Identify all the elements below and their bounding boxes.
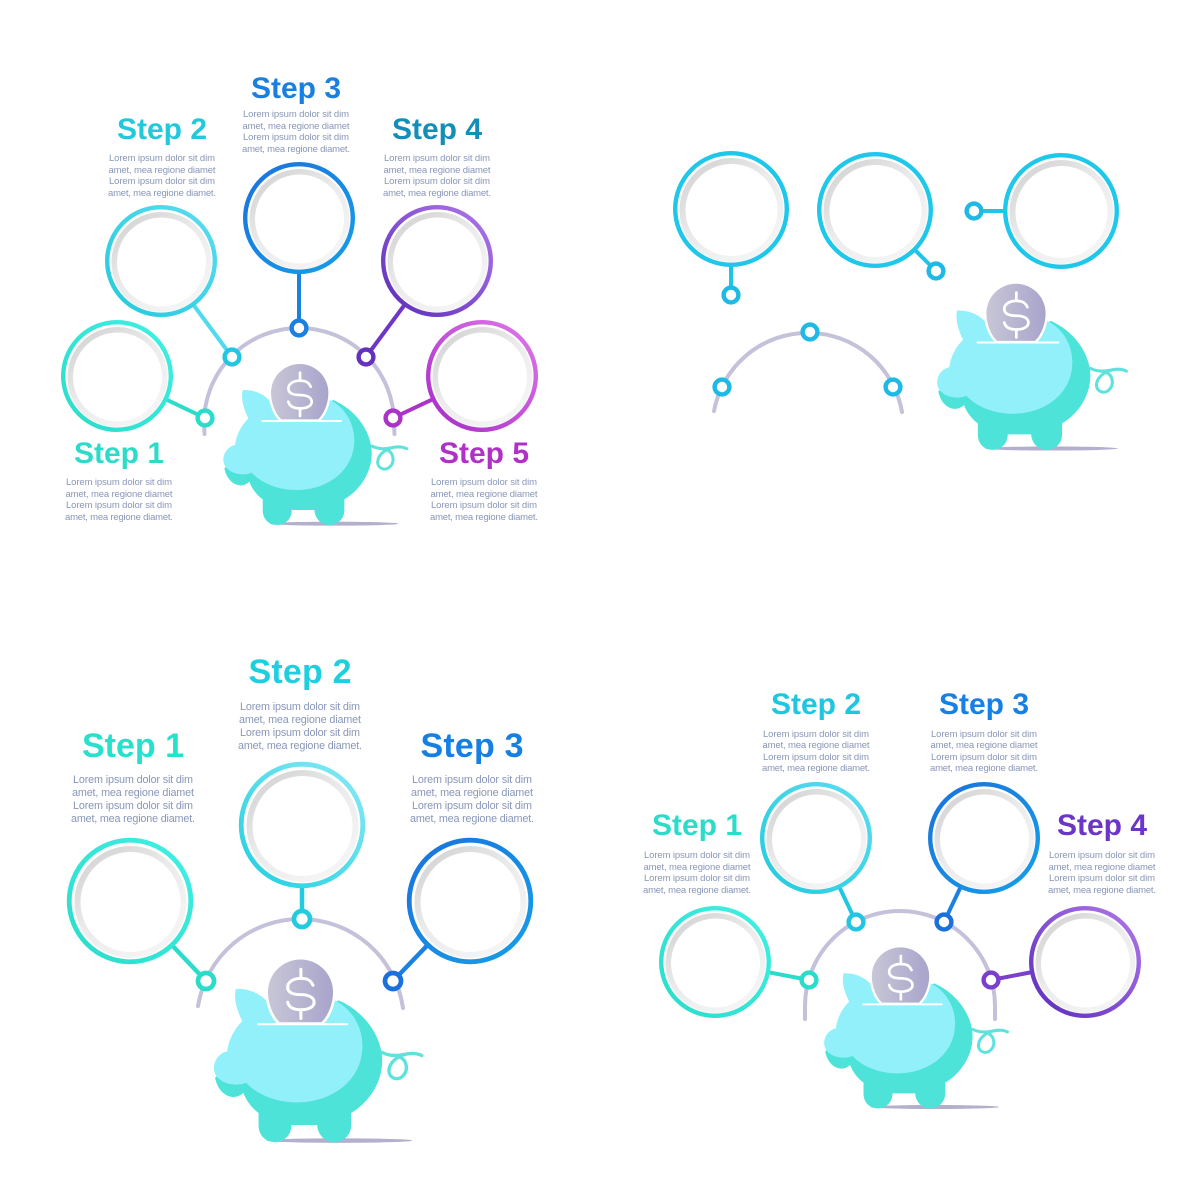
step 1 text: amet, mea regione diamet: [644, 862, 751, 873]
piggy bank icon: [214, 959, 422, 1143]
step 1 circle: [69, 840, 214, 989]
step 4 text: amet, mea regione diamet.: [383, 188, 491, 199]
step 1 text: [71, 727, 195, 825]
step 2 circle: [241, 764, 363, 927]
step 4 text: Lorem ipsum dolor sit dim: [1049, 873, 1155, 884]
step 2 text: amet, mea regione diamet.: [108, 188, 216, 199]
step 3 text: Step 3: [939, 688, 1029, 721]
step 3 text: amet, mea regione diamet.: [242, 144, 350, 155]
step 3 circle: [245, 164, 353, 335]
step 4 text: amet, mea regione diamet: [384, 165, 491, 176]
step 2 text: amet, mea regione diamet: [239, 714, 361, 726]
step 4 text: amet, mea regione diamet.: [1048, 885, 1156, 896]
step 4 text: Lorem ipsum dolor sit dim: [384, 153, 490, 164]
step 2 text: amet, mea regione diamet: [108, 165, 216, 176]
step 4 text: Lorem ipsum dolor sit dim: [384, 176, 490, 187]
step 3 text: [242, 72, 350, 155]
step 3 circle: [385, 840, 531, 989]
arc: [714, 333, 902, 412]
step 3 text: Step 3: [420, 727, 524, 765]
step 2 circle: [762, 784, 870, 929]
step 1 circle: [63, 322, 212, 430]
step 5 text: amet, mea regione diamet.: [430, 512, 538, 523]
step 3 text: amet, mea regione diamet: [242, 121, 350, 132]
step 2 text: Step 2: [248, 653, 352, 691]
step 2 circle: [107, 207, 239, 364]
step 5 text: Lorem ipsum dolor sit dim: [431, 477, 537, 488]
step 3 text: amet, mea regione diamet.: [410, 813, 534, 825]
blank circle middle: [819, 154, 943, 278]
step 1 text: Lorem ipsum dolor sit dim: [66, 477, 172, 488]
step 3 text: Step 3: [251, 72, 341, 105]
blank circle left: [675, 153, 787, 302]
step 4 text: [383, 113, 491, 199]
step 1 text: Step 1: [74, 437, 164, 470]
step 1 text: amet, mea regione diamet.: [71, 813, 195, 825]
step 1 text: Step 1: [82, 727, 184, 765]
step 5 circle: [386, 322, 536, 430]
step 2 text: Lorem ipsum dolor sit dim: [763, 752, 869, 763]
step 1 text: Lorem ipsum dolor sit dim: [644, 873, 750, 884]
step 2 text: Lorem ipsum dolor sit dim: [763, 729, 869, 740]
step 3 text: [930, 688, 1038, 774]
step 1 text: Step 1: [652, 809, 742, 842]
step 2 text: amet, mea regione diamet.: [762, 763, 870, 774]
step 1 text: Lorem ipsum dolor sit dim: [644, 850, 750, 861]
step 3 text: Lorem ipsum dolor sit dim: [931, 729, 1037, 740]
step 1 text: Lorem ipsum dolor sit dim: [73, 774, 193, 786]
step 1 text: [65, 437, 173, 523]
piggy bank icon: [937, 284, 1126, 451]
arc: [198, 919, 403, 1008]
step 3 text: Lorem ipsum dolor sit dim: [412, 800, 532, 812]
step 2 text: Step 2: [117, 113, 207, 146]
step 5 text: [430, 437, 538, 523]
step 1 text: [643, 809, 751, 896]
step 4 text: Lorem ipsum dolor sit dim: [1049, 850, 1155, 861]
step 3 text: amet, mea regione diamet: [930, 740, 1038, 751]
step 3 text: amet, mea regione diamet.: [930, 763, 1038, 774]
step 3 text: Lorem ipsum dolor sit dim: [412, 774, 532, 786]
step 4 text: Step 4: [392, 113, 482, 146]
step 3 text: Lorem ipsum dolor sit dim: [931, 752, 1037, 763]
step 5 text: Lorem ipsum dolor sit dim: [431, 500, 537, 511]
step 2 text: Lorem ipsum dolor sit dim: [109, 176, 215, 187]
step 2 text: [762, 688, 870, 774]
step 3 text: amet, mea regione diamet: [411, 787, 533, 799]
arc: [805, 911, 995, 1019]
step 2 text: Lorem ipsum dolor sit dim: [240, 701, 360, 713]
step 3 circle: [930, 784, 1038, 929]
step 3 text: Lorem ipsum dolor sit dim: [243, 132, 349, 143]
step 4 text: [1048, 809, 1156, 896]
step 2 text: Lorem ipsum dolor sit dim: [109, 153, 215, 164]
step 2 text: [238, 653, 362, 752]
arc nodes: [715, 325, 900, 394]
step 1 text: amet, mea regione diamet: [72, 787, 194, 799]
step 1 text: amet, mea regione diamet.: [643, 885, 751, 896]
step 5 text: Step 5: [439, 437, 529, 470]
step 1 text: Lorem ipsum dolor sit dim: [66, 500, 172, 511]
step 2 text: Lorem ipsum dolor sit dim: [240, 727, 360, 739]
step 3 text: [410, 727, 534, 825]
step 4 circle: [359, 207, 491, 364]
step 3 text: Lorem ipsum dolor sit dim: [243, 109, 349, 120]
step 1 text: amet, mea regione diamet.: [65, 512, 173, 523]
piggy bank icon: [824, 947, 1007, 1109]
step 1 circle: [661, 908, 816, 1016]
step 5 text: amet, mea regione diamet: [430, 489, 538, 500]
step 2 text: amet, mea regione diamet: [762, 740, 870, 751]
piggy bank icon: [223, 364, 407, 526]
panel: blank elements set: [675, 153, 1126, 451]
blank circle right: [967, 155, 1117, 267]
step 4 text: amet, mea regione diamet: [1048, 862, 1156, 873]
step 4 circle: [984, 908, 1139, 1016]
step 2 text: [108, 113, 216, 199]
arc: [204, 328, 394, 434]
step 2 text: amet, mea regione diamet.: [238, 740, 362, 752]
step 1 text: amet, mea regione diamet: [66, 489, 173, 500]
panel: three-step diagram: [69, 653, 534, 1143]
panel: four-step diagram: [643, 688, 1156, 1109]
step 2 text: Step 2: [771, 688, 861, 721]
step 1 text: Lorem ipsum dolor sit dim: [73, 800, 193, 812]
panel: five-step diagram: [63, 72, 538, 526]
step 4 text: Step 4: [1057, 809, 1147, 842]
